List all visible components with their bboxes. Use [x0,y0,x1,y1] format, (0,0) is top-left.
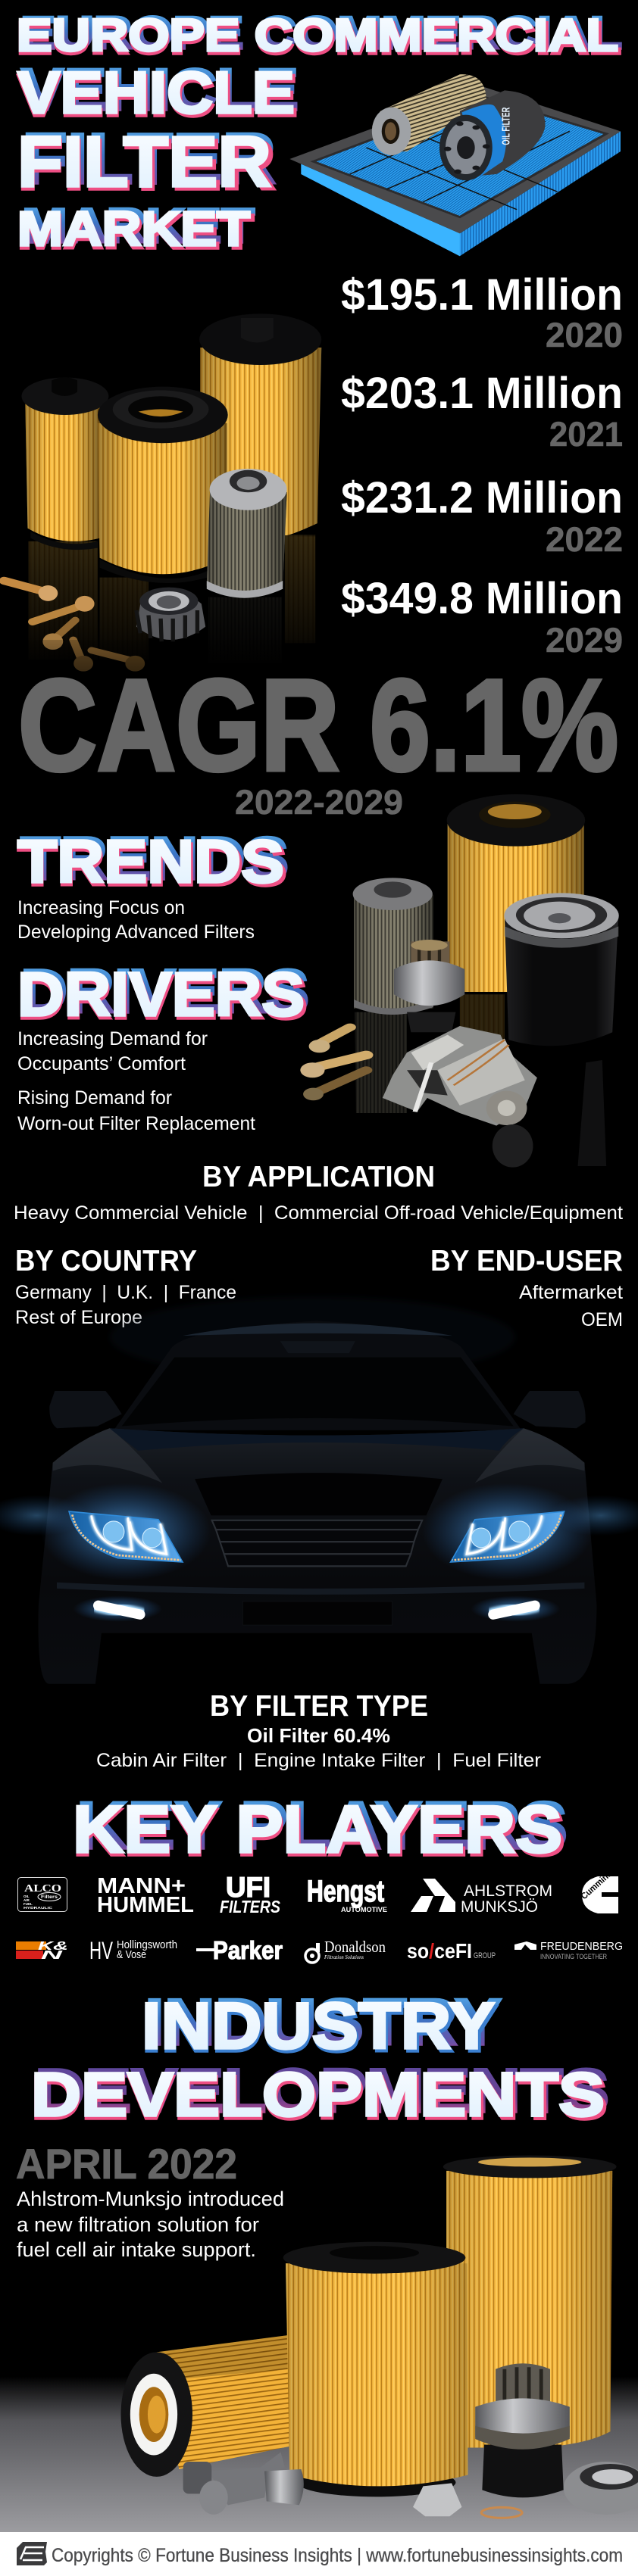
value 2029: 2029 [546,621,623,660]
bearing [564,2462,638,2515]
roof and windshield [114,1321,521,1430]
value 2021: $203.1 Million [341,369,623,418]
heading: industry developments: INDUSTRY [142,1993,498,2066]
segment: by end-user: Aftermarket [519,1282,623,1303]
development description: fuel cell air intake support. [17,2238,256,2261]
filter small steel [207,469,287,598]
image: car front with headlights [0,1296,638,1684]
logo: K&N: K& [38,1940,68,1953]
logo: Freudenberg: FREUDENBERG [540,1940,623,1953]
heading: drivers: DRIVERS [20,957,309,1026]
segment: by end-user [430,1245,623,1330]
value 2022: 2022 [546,520,623,559]
title: MARKET [22,198,255,253]
icon: Fortune Business Insights logo [17,2542,47,2565]
market values [341,270,623,660]
heading: key players: KEY PLAYERS [77,1788,568,1863]
fog lights [73,1595,560,1622]
segment: by end-user: OEM [581,1309,623,1330]
segment: by application: BY APPLICATION [202,1161,435,1193]
heading: industry developments: DEVELOPMENTS [31,2060,605,2129]
starter gear [475,2363,570,2497]
grille [212,1520,422,1566]
logo: Hollingsworth & Vose: HV [89,1937,113,1964]
yellow filter [447,794,585,992]
segment: by country: BY COUNTRY [15,1245,197,1277]
logo: Hollingsworth & Vose [89,1937,177,1964]
heading: trends: TRENDS [20,825,289,892]
logo: Donaldson: Donaldson [324,1938,386,1956]
logo: Freudenberg: INNOVATING TOGETHER [540,1953,607,1960]
logo: Alco: FUEL [23,1902,33,1906]
heading: industry developments: INDUSTRY [145,1986,502,2059]
logo: Alco: AIR [23,1898,30,1902]
heading: key players: KEY PLAYERS [73,1792,562,1867]
logo: Cummins: Cummins [579,1868,614,1901]
steel filter [353,878,433,1015]
title: MARKET [17,201,250,256]
icon: oil filter canister: OIL FILTER [500,108,512,145]
filter middle [283,2242,468,2496]
text: trends body: Developing Advanced Filters [17,922,255,943]
copper ring [481,2507,522,2518]
text: drivers body: Increasing Demand for [17,1028,208,1049]
text: drivers body: Worn-out Filter Replacement [17,1113,255,1134]
title: EUROPE COMMERCIAL [17,13,621,64]
logo: Mann+Hummel: MANN+ [97,1874,186,1898]
right headlight [451,1511,565,1562]
title: FILTER [17,125,276,205]
heading: trends: TRENDS [17,831,287,898]
segment: by application: Heavy Commercial Vehicle | Commercial Off-road Vehicle/Equipment [14,1202,623,1224]
bolts [300,1028,366,1100]
logo: UFI Filters: UFI [226,1872,271,1903]
segment: by filter type: Oil Filter 60.4% [247,1724,390,1747]
logo: Ahlstrom Munksjo: MUNKSJÖ [461,1898,538,1916]
value 2022 [341,473,623,559]
logo: Alco [18,1878,67,1911]
logo: Ahlstrom Munksjo [411,1879,552,1916]
left headlight [69,1511,183,1562]
logo: Hengst: AUTOMOTIVE [341,1906,387,1914]
heading: industry developments [31,1986,609,2132]
text: trends body: Increasing Focus on [17,897,185,918]
image: floor and oil filters [0,2155,638,2532]
filter center [98,387,228,583]
logo: Hollingsworth & Vose: & Vose [117,1948,146,1961]
value 2020: $195.1 Million [341,270,623,320]
logos row 2 [16,1936,623,1964]
heading: drivers: DRIVERS [17,963,308,1032]
heading: trends: TRENDS [17,828,284,895]
footer [0,2532,638,2576]
development date: APRIL 2022 [16,2140,237,2188]
text: drivers body: Occupants’ Comfort [17,1053,186,1074]
logo: Alco: Filters [41,1895,58,1900]
image: filters, pump and bolts [300,794,619,1168]
logo: Cummins [579,1868,618,1913]
number plate [242,1601,392,1625]
segment: by filter type [96,1690,541,1771]
icon: paper cartridge filter [372,74,486,155]
filter lying [120,2335,289,2477]
segment: by filter type: BY FILTER TYPE [210,1690,428,1723]
segment: by filter type: Cabin Air Filter | Engine Intake Filter | Fuel Filter [96,1750,541,1771]
heading: drivers: DRIVERS [17,960,305,1029]
hex nut [413,2483,461,2516]
logo: Sogefi: GROUP [474,1951,496,1960]
logo: Hengst: Hengst [307,1875,384,1908]
logo: UFI Filters [220,1872,281,1916]
logo: Mann+Hummel [97,1874,194,1917]
text: drivers body: Rising Demand for [17,1087,172,1109]
value 2022: $231.2 Million [341,473,623,522]
logo: Hengst [307,1875,387,1914]
black can filter [504,893,619,1046]
heading: industry developments: DEVELOPMENTS [35,2057,609,2125]
filter back [443,2155,617,2448]
segment: by country [15,1245,236,1328]
text: trends body [17,897,255,943]
CAGR headline: 2022-2029 [235,783,403,822]
filter left [21,377,108,550]
title: VEHICLE [21,56,299,123]
title: EUROPE COMMERCIAL [17,10,618,61]
logo: Alco: ALCO [24,1883,61,1895]
logo: Sogefi: so/ceFI [407,1939,472,1963]
title: EUROPE COMMERCIAL [20,8,622,58]
text: drivers body [17,1028,255,1134]
development description: Ahlstrom-Munksjo introduced [17,2188,284,2210]
logo: Hollingsworth & Vose: Hollingsworth [117,1938,177,1951]
value 2021: 2021 [549,415,623,454]
filter back right [199,313,321,536]
value 2029: $349.8 Million [341,574,623,623]
steel filter reflection [355,1012,407,1113]
car body [39,1428,596,1684]
segment: by application [14,1161,623,1224]
image: yellow oil filters and parts [0,313,326,672]
logo: Alco: OIL [23,1895,30,1898]
development description [17,2188,284,2261]
heading: key players: KEY PLAYERS [73,1795,565,1870]
logo: Donaldson [305,1938,386,1963]
value 2021 [341,369,623,454]
pump reflection [493,1124,533,1168]
logo: K&N: N [41,1949,63,1962]
logo: K&N [16,1940,68,1962]
value 2020 [341,270,623,354]
bolts [4,581,145,672]
headlight glow [0,1483,638,1580]
logo: Parker: Parker [213,1936,283,1964]
title: MARKET [17,204,254,259]
can reflection [578,1060,606,1166]
logo: Ahlstrom Munksjo: AHLSTROM [464,1882,552,1900]
yellow reflection [460,994,505,1040]
logo: Donaldson: Filtration Solutions [324,1954,364,1960]
universal joint [183,2453,304,2515]
icon: air filter with oil filters [289,74,621,256]
mirrors [49,1391,586,1428]
segment: by country: Germany | U.K. | France [15,1282,236,1303]
logos row 1 [18,1868,618,1917]
logo: Alco: HYDRAULIC [23,1906,53,1910]
title: FILTER [22,119,276,199]
title: FILTER [17,122,271,202]
heading: industry developments: INDUSTRY [142,1990,495,2063]
title: VEHICLE [17,62,298,129]
title [17,8,622,259]
development description: a new filtration solution for [17,2213,259,2236]
logo: UFI Filters: FILTERS [220,1897,281,1916]
logo: Mann+Hummel: HUMMEL [97,1893,194,1917]
logo: Freudenberg [514,1940,623,1960]
value 2029 [341,574,623,660]
segment: by country: Rest of Europe [15,1307,142,1328]
starter gear [394,940,464,1032]
title: VEHICLE [17,59,295,126]
segment: by end-user: BY END-USER [430,1245,623,1277]
icon: oil filter canister [439,90,546,180]
heading: industry developments: DEVELOPMENTS [31,2063,608,2132]
value 2020: 2020 [546,316,623,354]
reflections [29,535,315,663]
pump [383,1026,537,1126]
bearing [136,588,205,641]
